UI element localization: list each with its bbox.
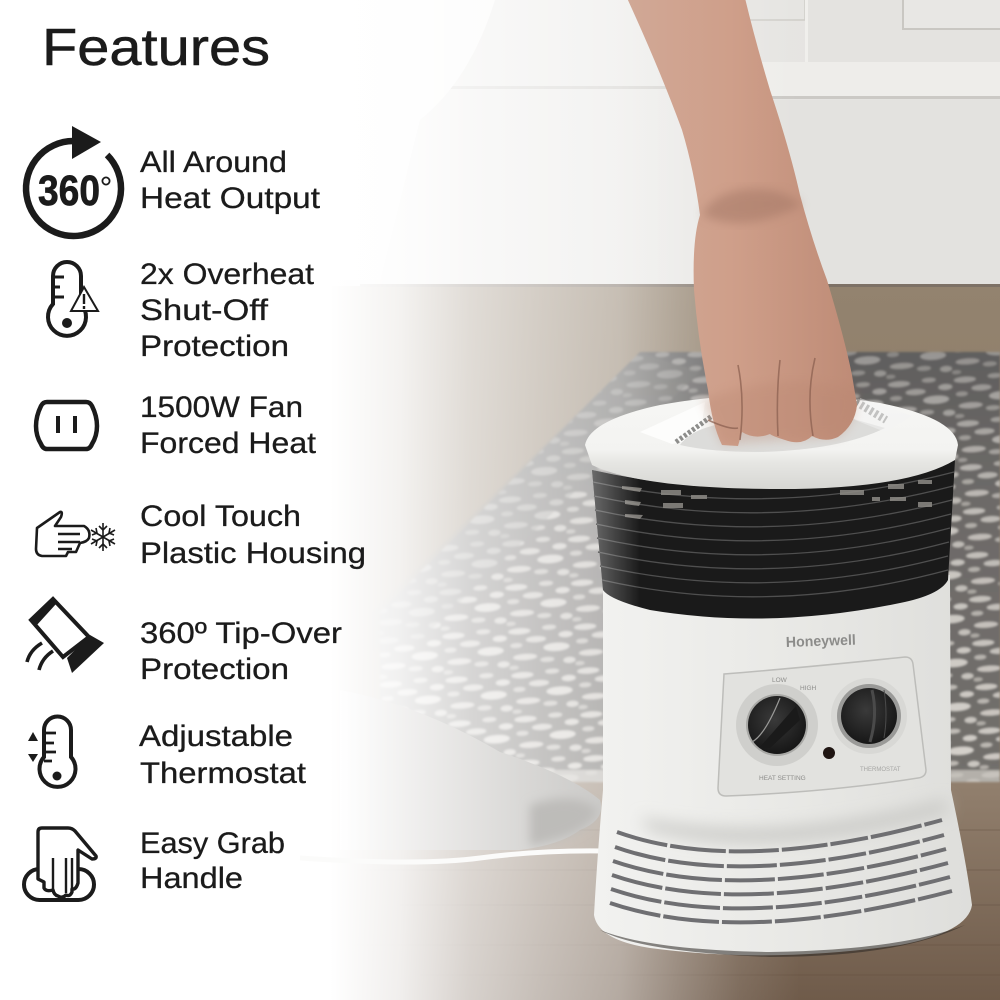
icon: hand and snowflake — [36, 512, 115, 556]
title: Features — [42, 19, 270, 77]
label: All Around Heat Output: Heat Output — [140, 182, 321, 215]
label: Easy Grab Handle — [140, 827, 285, 895]
label: 2x Overheat Shut-Off Protection: Protection — [140, 330, 289, 363]
label: Cool Touch Plastic Housing — [140, 500, 366, 570]
control panel: HIGH — [800, 685, 817, 692]
icon: tipped heater — [27, 597, 104, 673]
wall — [0, 0, 1000, 288]
control panel: HEAT SETTING — [759, 775, 806, 782]
power cord — [300, 851, 604, 862]
label: 2x Overheat Shut-Off Protection: Shut-Off — [140, 294, 269, 327]
indicator light — [823, 747, 835, 759]
feature: tip-over — [27, 597, 342, 686]
hand and forearm — [627, 0, 857, 446]
label: Cool Touch Plastic Housing: Cool Touch — [140, 500, 301, 533]
top ring handle — [585, 394, 958, 489]
icon: thermometer warning — [48, 262, 98, 336]
feature: 1500W — [36, 391, 317, 460]
icon: hand in handle — [24, 828, 96, 900]
label: 1500W Fan Forced Heat — [140, 391, 317, 460]
icon: 360 degree arrow — [26, 126, 121, 236]
lower air vents — [610, 820, 952, 922]
label: Adjustable Thermostat — [139, 720, 307, 790]
icon: 360 degree arrow: 360 — [38, 167, 100, 215]
label: Adjustable Thermostat: Thermostat — [140, 757, 307, 790]
black grille — [592, 460, 955, 619]
feature: thermostat — [28, 716, 307, 790]
label: 1500W Fan Forced Heat: 1500W Fan — [140, 391, 303, 424]
shell and base — [594, 575, 972, 957]
sock and cord — [300, 690, 604, 862]
label: Cool Touch Plastic Housing: Plastic Housing — [140, 537, 366, 570]
panel labels: LOW — [772, 677, 788, 684]
label: Easy Grab Handle: Handle — [140, 862, 243, 895]
space heater — [585, 394, 972, 957]
label: 360 Tip-Over Protection — [140, 617, 342, 686]
shelf shadow — [640, 800, 948, 842]
label: All Around Heat Output — [140, 146, 321, 215]
sock — [340, 690, 601, 850]
control panel — [718, 657, 926, 796]
rug — [372, 352, 1000, 782]
feature: cool touch — [36, 500, 366, 570]
feature: 360 all around heat — [26, 126, 321, 236]
control panel: THERMOSTAT — [860, 767, 901, 773]
label: 360 Tip-Over Protection: Protection — [140, 653, 289, 686]
label: Easy Grab Handle: Easy Grab — [140, 827, 285, 860]
right knob — [831, 678, 907, 754]
label: 1500W Fan Forced Heat: Forced Heat — [140, 427, 317, 460]
label: All Around Heat Output: All Around — [140, 146, 287, 179]
left knob — [736, 684, 818, 766]
label: 360 Tip-Over Protection: 360º Tip-Over — [140, 617, 342, 650]
floor — [0, 284, 1000, 1000]
feature: overheat protection — [48, 258, 315, 363]
icon: thermometer with arrows — [28, 716, 76, 787]
feature: grab handle — [24, 827, 285, 900]
feature list — [24, 126, 366, 900]
label: Adjustable Thermostat: Adjustable — [139, 720, 293, 753]
icon: outlet — [36, 402, 97, 449]
soft fade on heater left edge — [592, 470, 640, 610]
label: 2x Overheat Shut-Off Protection: 2x Overheat — [140, 258, 315, 291]
brand label: Honeywell — [786, 633, 856, 651]
label: 2x Overheat Shut-Off Protection — [140, 258, 315, 363]
